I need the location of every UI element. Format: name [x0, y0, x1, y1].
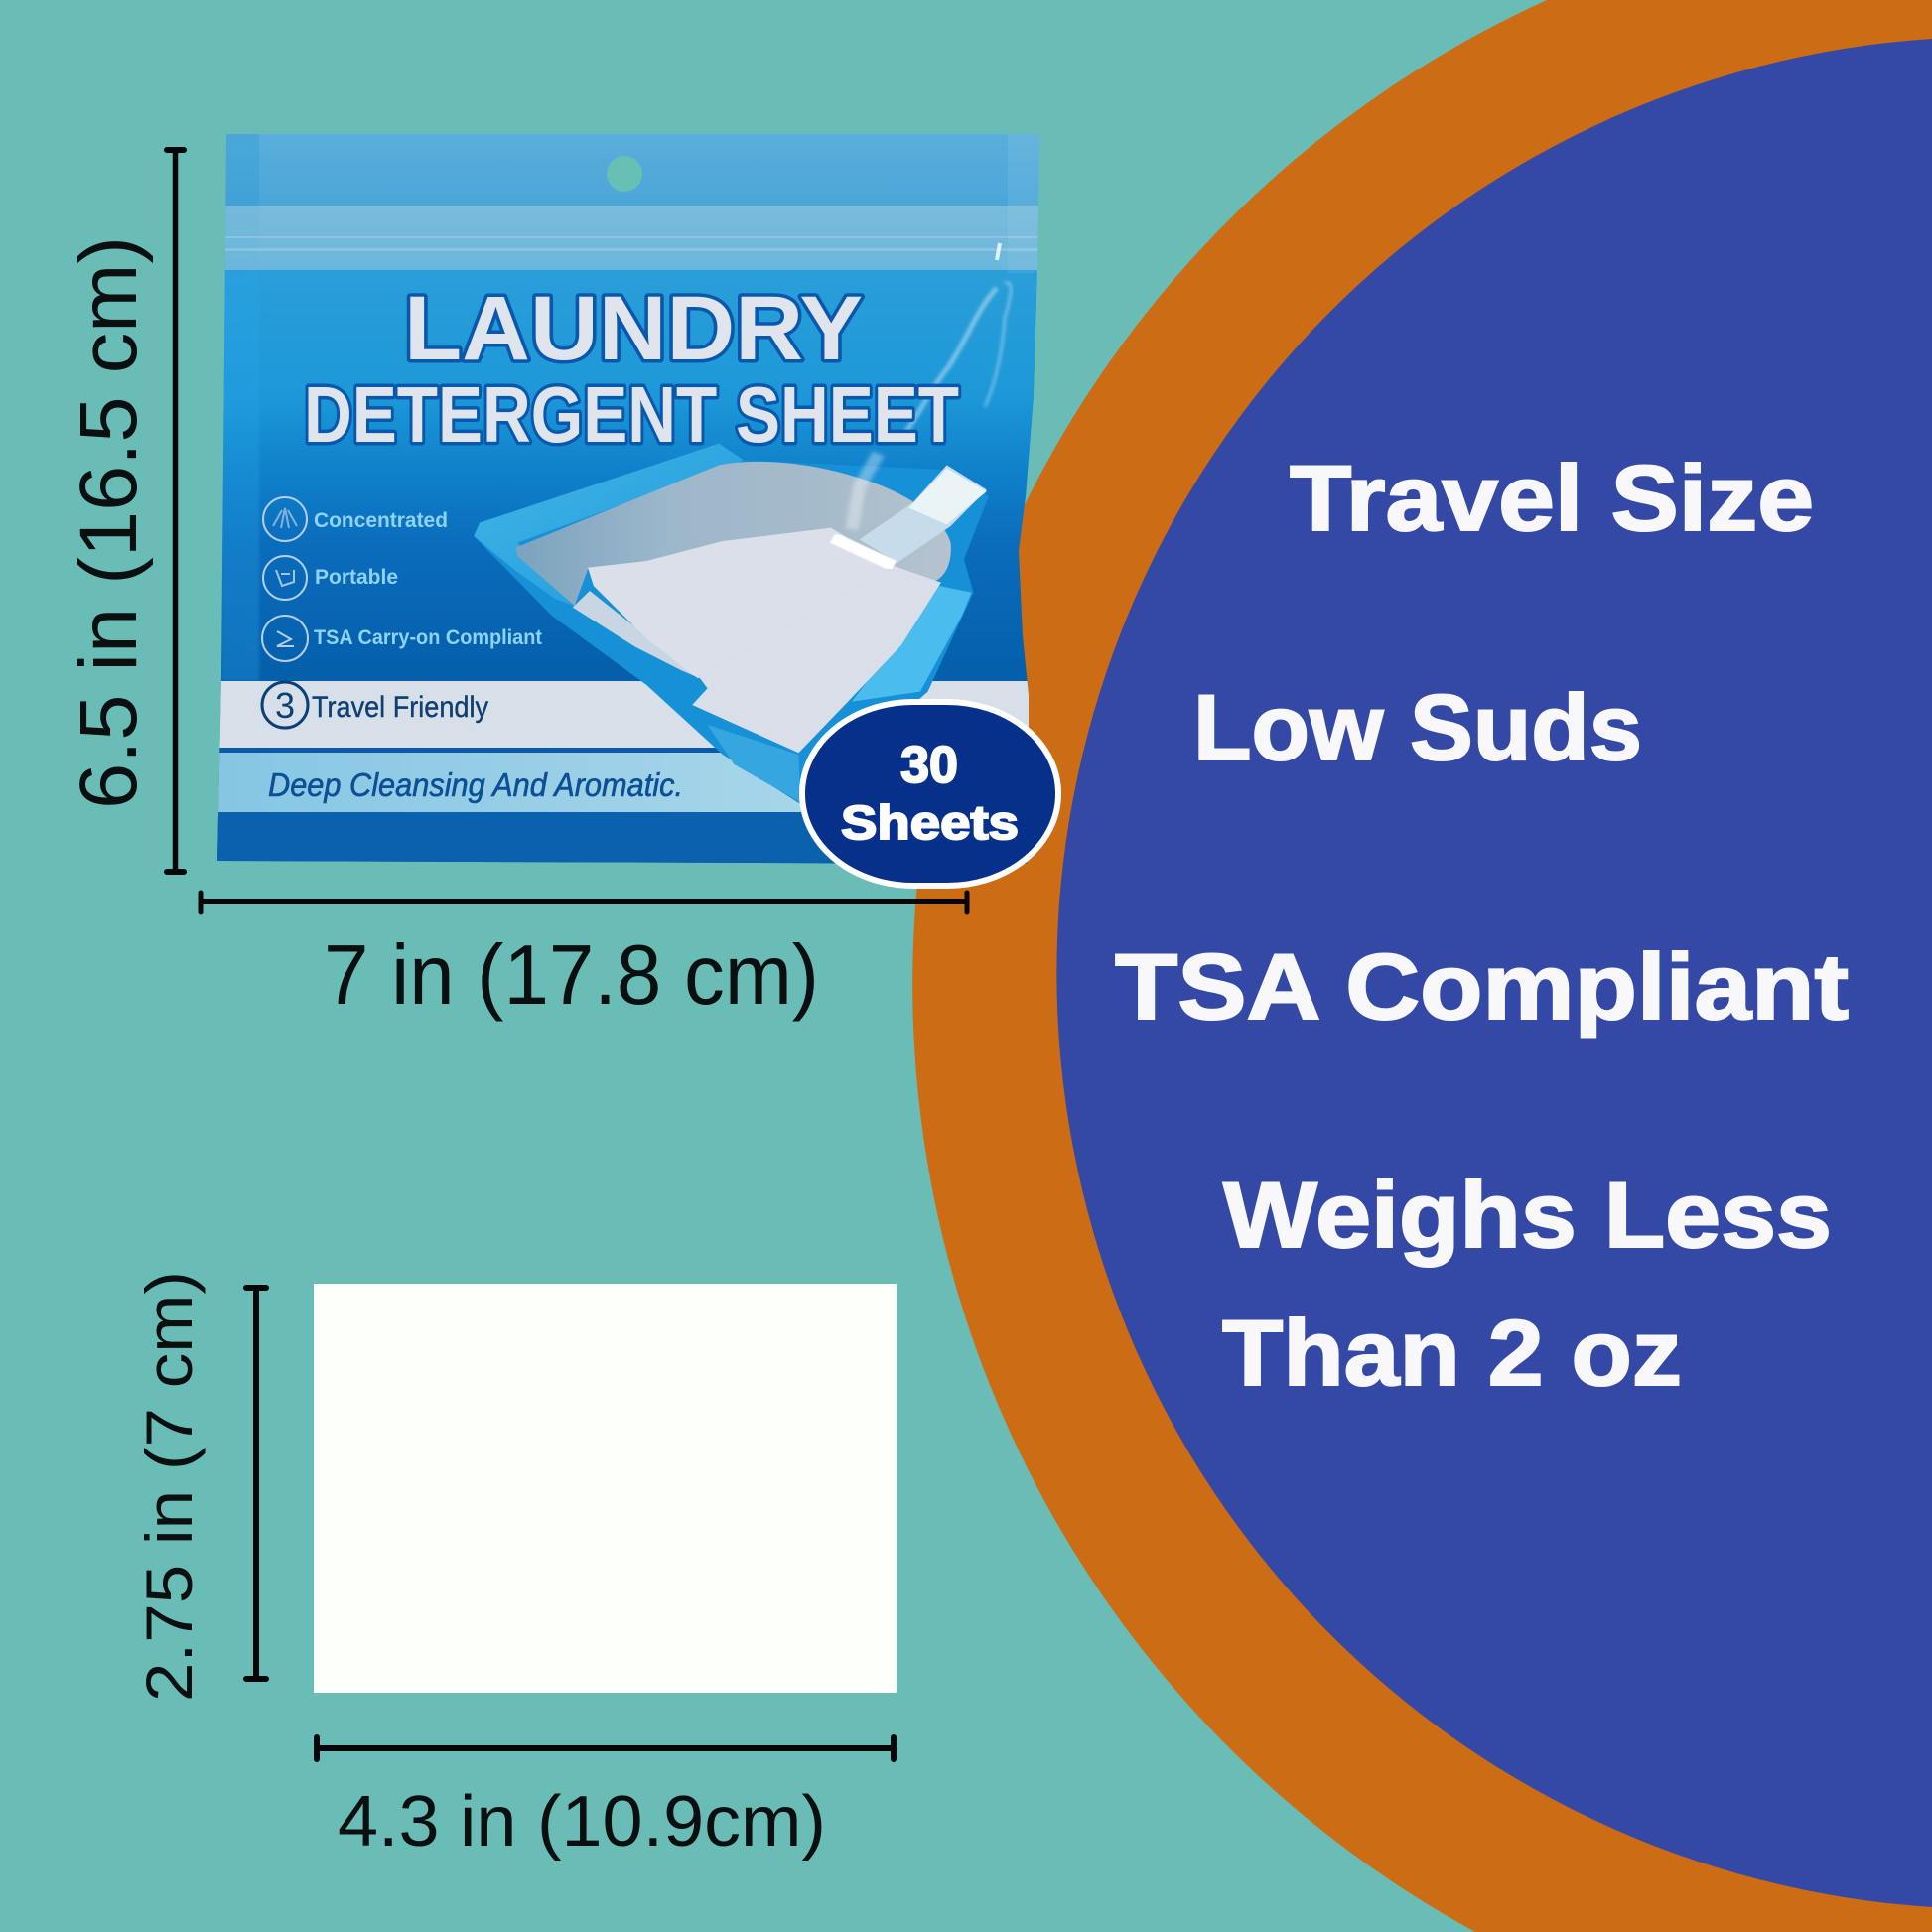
bag title [304, 278, 959, 459]
feature: weighs less: Weighs Less [1223, 1163, 1832, 1267]
travel friendly band [262, 682, 488, 728]
hang hole [607, 156, 642, 192]
dimension: bag height: 6.5 in (16.5 cm) [64, 236, 154, 809]
bag feature list [262, 497, 542, 661]
dimension: sheet width [317, 1737, 894, 1862]
badge: 30 sheets [802, 702, 1058, 886]
white sheet [314, 1284, 897, 1693]
bag feature list: Concentrated [314, 509, 448, 532]
detergent sheets window [474, 444, 989, 804]
dimension: sheet height [132, 1271, 266, 1702]
bag title: LAUNDRY [404, 278, 863, 379]
feature: TSA compliant: TSA Compliant [1115, 934, 1849, 1038]
feature: than 2 oz: Than 2 oz [1222, 1301, 1682, 1405]
feature: travel size: Travel Size [1290, 446, 1814, 550]
feature list text [1115, 446, 1849, 1405]
dimension: bag width: 7 in (17.8 cm) [324, 928, 819, 1023]
travel friendly band: Travel Friendly [312, 691, 488, 724]
travel friendly band: 3 [275, 685, 295, 726]
bag feature list: TSA Carry-on Compliant [314, 626, 542, 649]
blue circle panel [1056, 39, 1932, 1907]
dimension: bag width [201, 893, 967, 1023]
orange circle [912, 0, 1932, 1932]
badge: 30 sheets: Sheets [841, 797, 1019, 850]
tagline: Deep Cleansing And Aromatic. [268, 766, 683, 803]
dimension: bag height [64, 150, 184, 872]
feature: low suds: Low Suds [1193, 675, 1642, 779]
badge: 30 sheets: 30 [900, 737, 958, 794]
bag title: DETERGENT SHEET [304, 370, 959, 459]
product bag [213, 129, 1047, 869]
dimension: sheet height: 2.75 in (7 cm) [132, 1271, 206, 1702]
dimension: sheet width: 4.3 in (10.9cm) [338, 1782, 826, 1862]
bag feature list: Portable [315, 566, 398, 589]
